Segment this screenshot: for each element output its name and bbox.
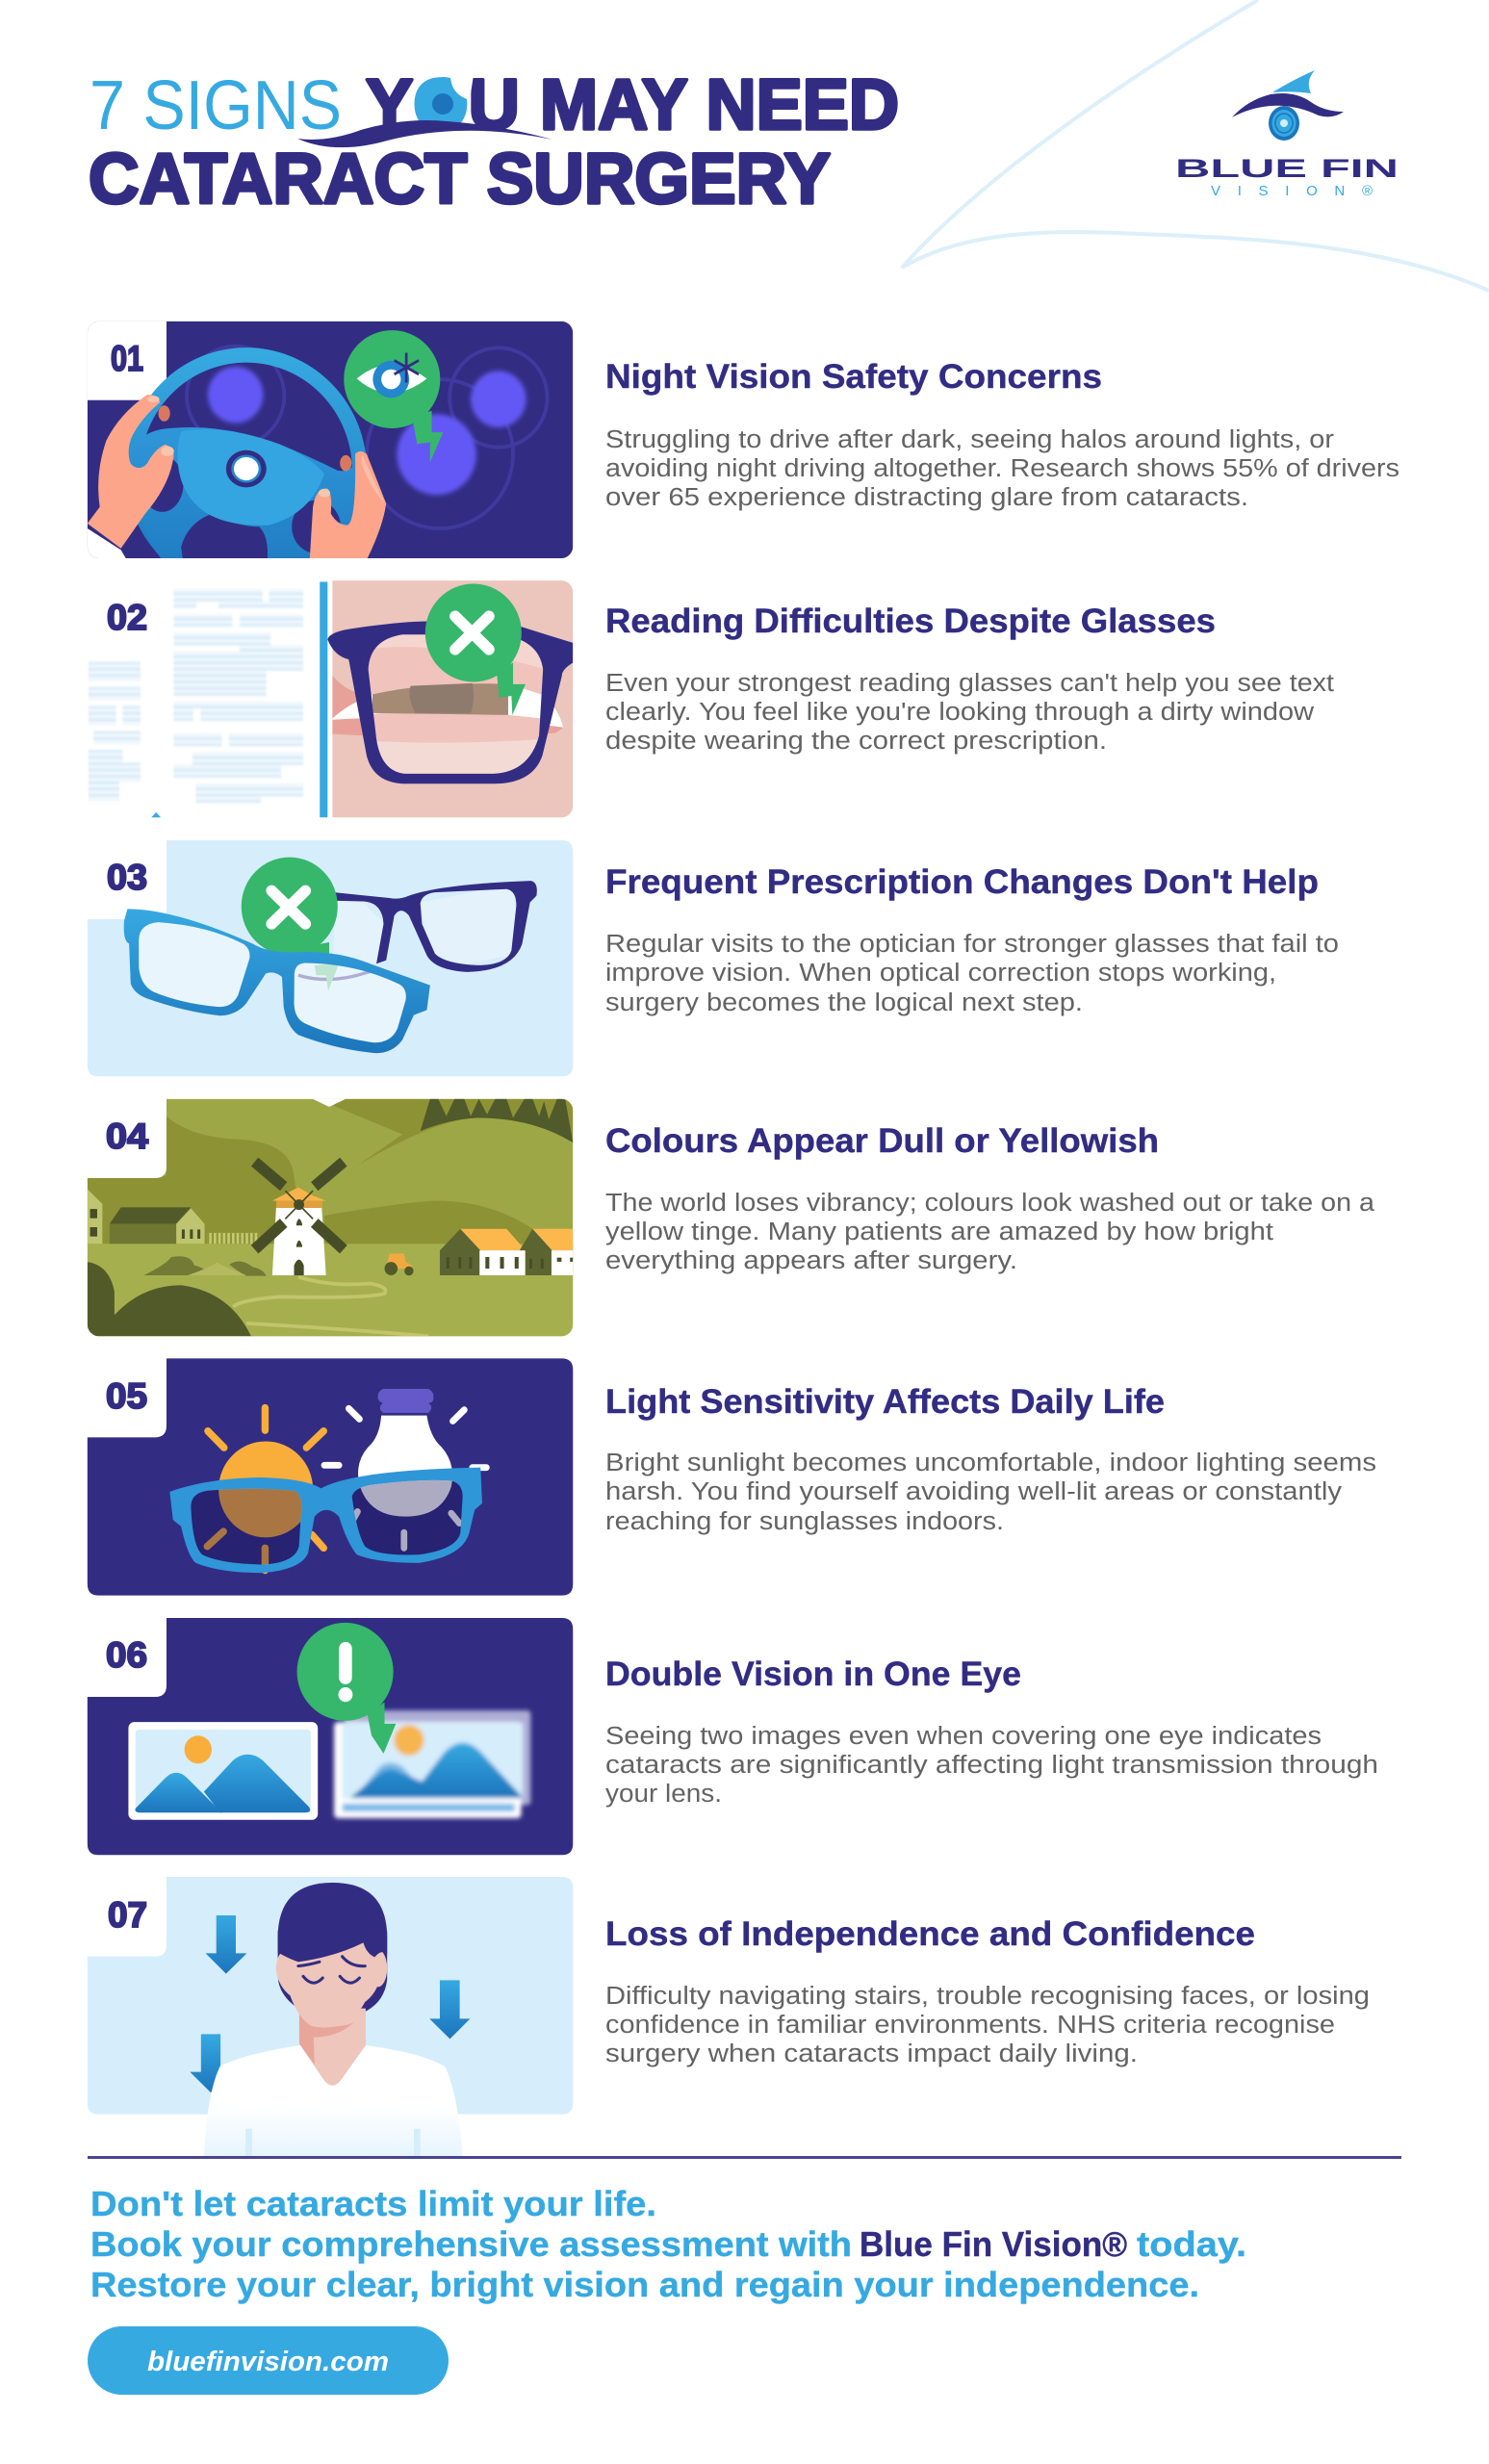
clear picture (128, 1722, 318, 1820)
logo fin (1272, 70, 1315, 93)
down arrows (190, 1915, 470, 2092)
sign 1 body (605, 426, 1399, 511)
blurred page text (89, 589, 303, 803)
call to action text (90, 2184, 1246, 2304)
logo wordmark: BLUE FIN (1175, 154, 1399, 183)
number 05: 05 (106, 1376, 147, 1416)
cta line 2: today. (1137, 2224, 1246, 2264)
hills (88, 1099, 573, 1337)
cta line 3: Restore your clear, bright vision and regain your independence. (90, 2265, 1199, 2304)
sign 1 body: avoiding night driving altogether. Research shows 55% of drivers (605, 455, 1399, 482)
steering wheel (129, 355, 367, 586)
sign 3 body: improve vision. When optical correction stops working, (605, 960, 1276, 987)
cta line 2: Blue Fin Vision® (860, 2224, 1127, 2264)
sign 7 body: Difficulty navigating stairs, trouble recognising faces, or losing (605, 1983, 1370, 2010)
glare lights (187, 346, 548, 528)
right hand (310, 451, 386, 560)
swoosh under you (297, 120, 552, 147)
title line 2: CATARACT SURGERY (89, 139, 831, 218)
tractor (385, 1254, 414, 1275)
cta line 2: Book your comprehensive assessment with (90, 2224, 852, 2264)
cta line 1: Don't let cataracts limit your life. (90, 2184, 656, 2223)
sign 7 heading: Loss of Independence and Confidence (605, 1915, 1255, 1953)
logo eye (1269, 106, 1299, 141)
title line 1: may need: MAY NEED (540, 64, 899, 144)
number 01: 01 (111, 339, 143, 378)
sign 3 body: surgery becomes the logical next step. (605, 989, 1083, 1016)
panel 7: loss of independence (88, 1877, 573, 2156)
sign 4 text (605, 1122, 1375, 1274)
panel 7 background (88, 1877, 573, 2115)
reading glasses frame (327, 621, 573, 783)
number 07: 07 (108, 1895, 147, 1935)
sign 3 heading: Frequent Prescription Changes Don't Help (605, 863, 1319, 901)
icon: eye in the O (422, 75, 474, 121)
sign 5 heading: Light Sensitivity Affects Daily Life (605, 1383, 1165, 1421)
icon: green bubble with cross (242, 858, 338, 961)
number 06: 06 (106, 1635, 147, 1675)
website button: bluefinvision.com (147, 2347, 389, 2377)
sign 7 body (605, 1983, 1370, 2067)
sign 6 heading: Double Vision in One Eye (605, 1656, 1021, 1693)
title line 1: you: YOU (366, 64, 520, 144)
sign 4 heading: Colours Appear Dull or Yellowish (605, 1122, 1159, 1160)
farmhouses (440, 1229, 573, 1275)
number 04: 04 (106, 1116, 148, 1156)
page marker (151, 812, 161, 817)
sign 7 body: surgery when cataracts impact daily living. (605, 2040, 1138, 2067)
sign 3 body: Regular visits to the optician for stronger glasses that fail to (605, 931, 1339, 958)
sign 5 body: harsh. You find yourself avoiding well-lit areas or constantly (605, 1478, 1342, 1505)
sun (207, 1408, 323, 1570)
notch (312, 1099, 347, 1107)
number tab 04 (84, 1095, 167, 1178)
panel 6: double vision (88, 1618, 573, 1855)
sign 2 body: despite wearing the correct prescription. (605, 728, 1107, 755)
blurred picture (334, 1710, 530, 1818)
sign 1 heading: Night Vision Safety Concerns (605, 358, 1102, 396)
foreground hill (88, 1262, 251, 1336)
left hand (88, 395, 174, 558)
sign 1 body: Struggling to drive after dark, seeing halos around lights, or (605, 426, 1335, 453)
sign 6 body: Seeing two images even when covering one eye indicates (605, 1723, 1322, 1750)
panel 5 background (88, 1358, 573, 1596)
blue glasses (124, 909, 430, 1053)
sign 4 body: yellow tinge. Many patients are amazed by how bright (605, 1219, 1273, 1245)
panel 3: glasses (88, 840, 573, 1076)
logo sub wordmark: VISION® (1211, 183, 1373, 199)
divider bar (320, 581, 327, 817)
sign 4 body: everything appears after surgery. (605, 1247, 1017, 1274)
sign 2 heading: Reading Difficulties Despite Glasses (605, 603, 1216, 640)
number tab 01 (84, 318, 167, 400)
light bulb (324, 1389, 486, 1548)
sign 6 text (605, 1656, 1378, 1808)
eye close-up (332, 676, 563, 738)
sign 2 body: clearly. You feel like you're looking through a dirty window (605, 699, 1315, 726)
sign 2 body: Even your strongest reading glasses can't help you see text (605, 670, 1334, 697)
sign 6 body: cataracts are significantly affecting light transmission through (605, 1752, 1378, 1779)
sign 7 body: confidence in familiar environments. NHS criteria recognise (605, 2012, 1335, 2039)
panel 3 background (88, 840, 573, 1076)
close-up background (332, 580, 573, 817)
logo (1175, 70, 1399, 199)
sign 3 body (605, 931, 1339, 1016)
website button (88, 2326, 449, 2395)
lens view (367, 633, 546, 776)
title line 1: 7 signs: 7 SIGNS (90, 67, 342, 144)
sign 2 body (605, 670, 1334, 755)
sign 1 body: over 65 experience distracting glare from cataracts. (605, 484, 1248, 511)
sign 4 body (605, 1190, 1375, 1274)
sign 6 body (605, 1723, 1378, 1808)
path (233, 1277, 428, 1336)
title (89, 64, 899, 218)
panel 4: dull landscape (84, 1095, 573, 1337)
sign 3 text (605, 863, 1339, 1016)
sign 6 body: your lens. (605, 1781, 722, 1808)
cta line 2 (90, 2224, 1246, 2264)
panel 2: reading (89, 580, 573, 817)
background fin outline (902, 0, 1489, 291)
number 02: 02 (107, 598, 147, 637)
sign 5 body: reaching for sunglasses indoors. (605, 1508, 1004, 1535)
left buildings (88, 1189, 259, 1244)
sunglasses (169, 1468, 482, 1573)
panel 6 background (88, 1618, 573, 1855)
icon: green bubble with eye (344, 330, 443, 462)
icon: green bubble with exclamation (297, 1623, 396, 1754)
bushes (143, 1256, 267, 1276)
sign 5 body (605, 1450, 1376, 1535)
sign 4 body: The world loses vibrancy; colours look washed out or take on a (605, 1190, 1375, 1217)
panel 1: night driving (87, 321, 574, 558)
sign 1 text (605, 358, 1399, 511)
sign 2 text (605, 603, 1334, 755)
sign 5 body: Bright sunlight becomes uncomfortable, indoor lighting seems (605, 1450, 1376, 1476)
sign 7 text (605, 1915, 1370, 2067)
panel 5: light sensitivity (88, 1358, 573, 1596)
icon: green bubble with cross (425, 584, 526, 715)
sign 5 text (605, 1383, 1376, 1535)
person (204, 1883, 463, 2156)
windmill (255, 1162, 344, 1275)
navy glasses (334, 881, 537, 972)
number 03: 03 (107, 858, 147, 897)
logo wave (1232, 93, 1344, 117)
